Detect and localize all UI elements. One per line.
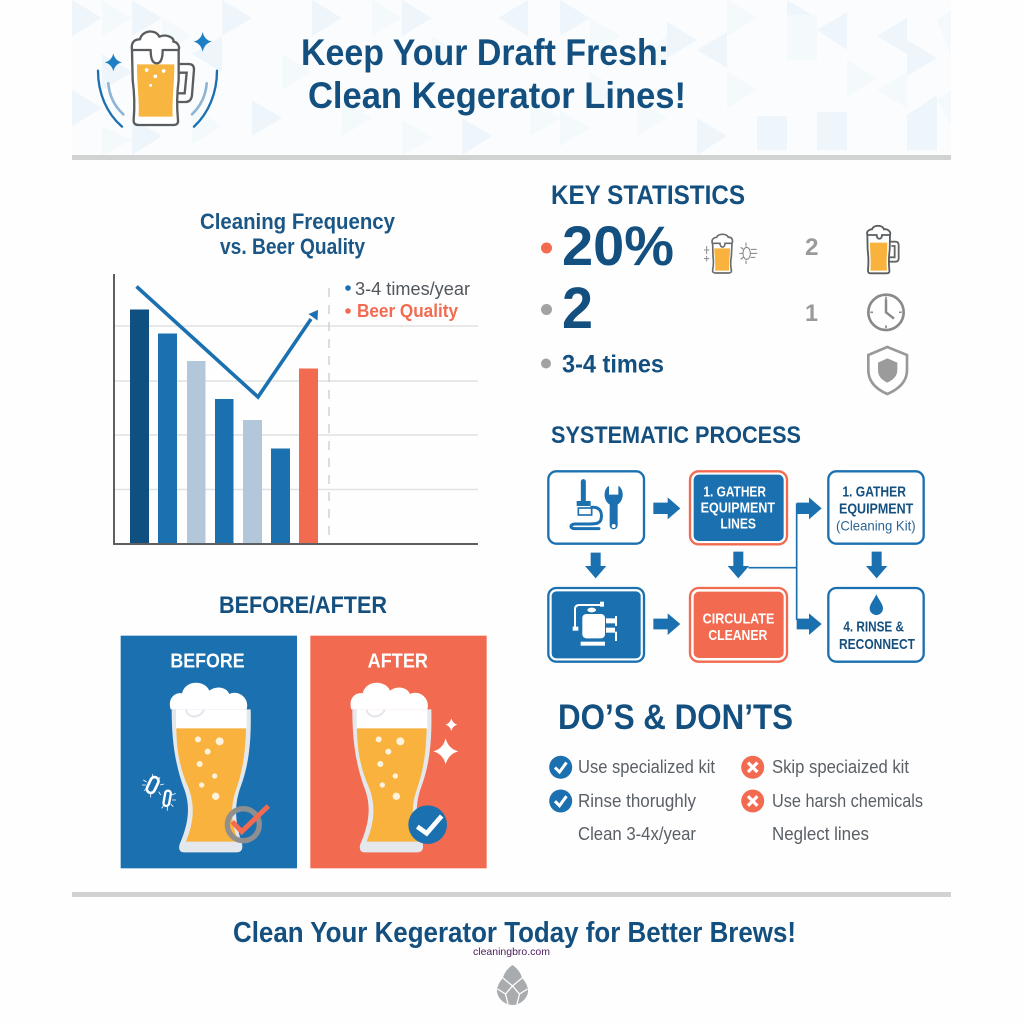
don't item: neglect lines: Neglect lines [772,823,869,844]
step: gather equipment cleaning kit: (Cleaning Kit) [836,519,916,534]
footer rule [72,892,951,897]
icon: beer mug logo [98,31,217,127]
icon: check [549,756,572,779]
chart heading: Cleaning Frequency [200,209,396,234]
step: rinse and reconnect: 4. RINSE & [843,620,904,636]
icon: sparkles [433,718,458,764]
icon: cross [741,756,764,779]
stat: 2 [541,276,593,341]
header background [72,0,951,155]
chart heading [200,209,396,259]
icon: clock [868,295,904,330]
source credit: cleaningbro.com [473,946,550,958]
panel: before [121,636,297,868]
bar chart: cleaning frequency vs beer quality [114,274,478,544]
stat: secondary 2: 2 [805,234,818,261]
systematic process heading: SYSTEMATIC PROCESS [551,422,801,449]
header rule [72,155,951,160]
stat: secondary 1: 1 [805,300,818,327]
panel: after [310,636,487,868]
panel: before: BEFORE [170,651,245,673]
process flow diagram [548,471,924,662]
beer glass: after [351,683,431,852]
title: Clean Kegerator Lines! [308,75,686,116]
do item: rinse thoroughly: Rinse thorughly [578,790,697,811]
key statistics heading: KEY STATISTICS [551,180,745,210]
don't item: harsh chemicals: Use harsh chemicals [772,790,923,811]
icon: failed check badge [227,806,268,841]
chart legend: Beer Quality [357,300,459,321]
step: rinse and reconnect: RECONNECT [839,637,915,653]
step: circulate cleaner [690,588,787,662]
step: circulate cleaner: CLEANER [708,628,768,644]
step: gather equipment lines: 1. GATHER [703,485,767,501]
icon: hop [497,965,528,1005]
do item: clean schedule: Clean 3-4x/year [578,823,696,844]
title: Keep Your Draft Fresh: [301,32,669,73]
step: machine icon box [548,588,644,662]
do's list [549,756,715,844]
stat: 3-4 times: 3-4 times [562,350,664,378]
beer glass: before [170,683,251,852]
icon: small glass and bacteria [704,234,757,273]
step: circulate cleaner: CIRCULATE [703,611,774,627]
step: rinse and reconnect [828,588,924,662]
stat: 2: 2 [562,276,593,341]
chart legend: 3-4 times/year [355,279,470,299]
chart heading: vs. Beer Quality [220,234,366,259]
don'ts list [741,756,923,844]
chart legend [345,279,470,321]
icon: cross [741,790,764,812]
panel: after: AFTER [368,651,429,673]
connector lines [748,503,797,620]
step: tools icon box [548,471,644,544]
key statistics [541,214,907,394]
icon: success check badge [408,805,447,844]
do item: use specialized kit: Use specialized kit [578,756,715,777]
step: gather equipment lines: LINES [720,516,756,532]
icon: mug [867,226,899,273]
step: gather equipment lines: EQUIPMENT [701,500,775,516]
stat: 20%: 20% [562,214,674,277]
icon: check [549,790,572,812]
footer call to action: Clean Your Kegerator Today for Better Brews! [233,917,796,949]
step: gather equipment lines [690,471,787,544]
step: gather equipment cleaning kit: EQUIPMENT [839,501,914,517]
icon: shield [868,347,907,394]
step: gather equipment cleaning kit [828,471,924,544]
don't item: skip kit: Skip speciaized kit [772,756,909,777]
arrows [585,497,887,635]
do's and don'ts heading: DO’S & DON’TS [558,698,793,737]
before/after heading: BEFORE/AFTER [219,592,387,619]
title [301,32,686,116]
icon: bacteria [142,774,176,811]
step: gather equipment cleaning kit: 1. GATHER [842,485,907,501]
